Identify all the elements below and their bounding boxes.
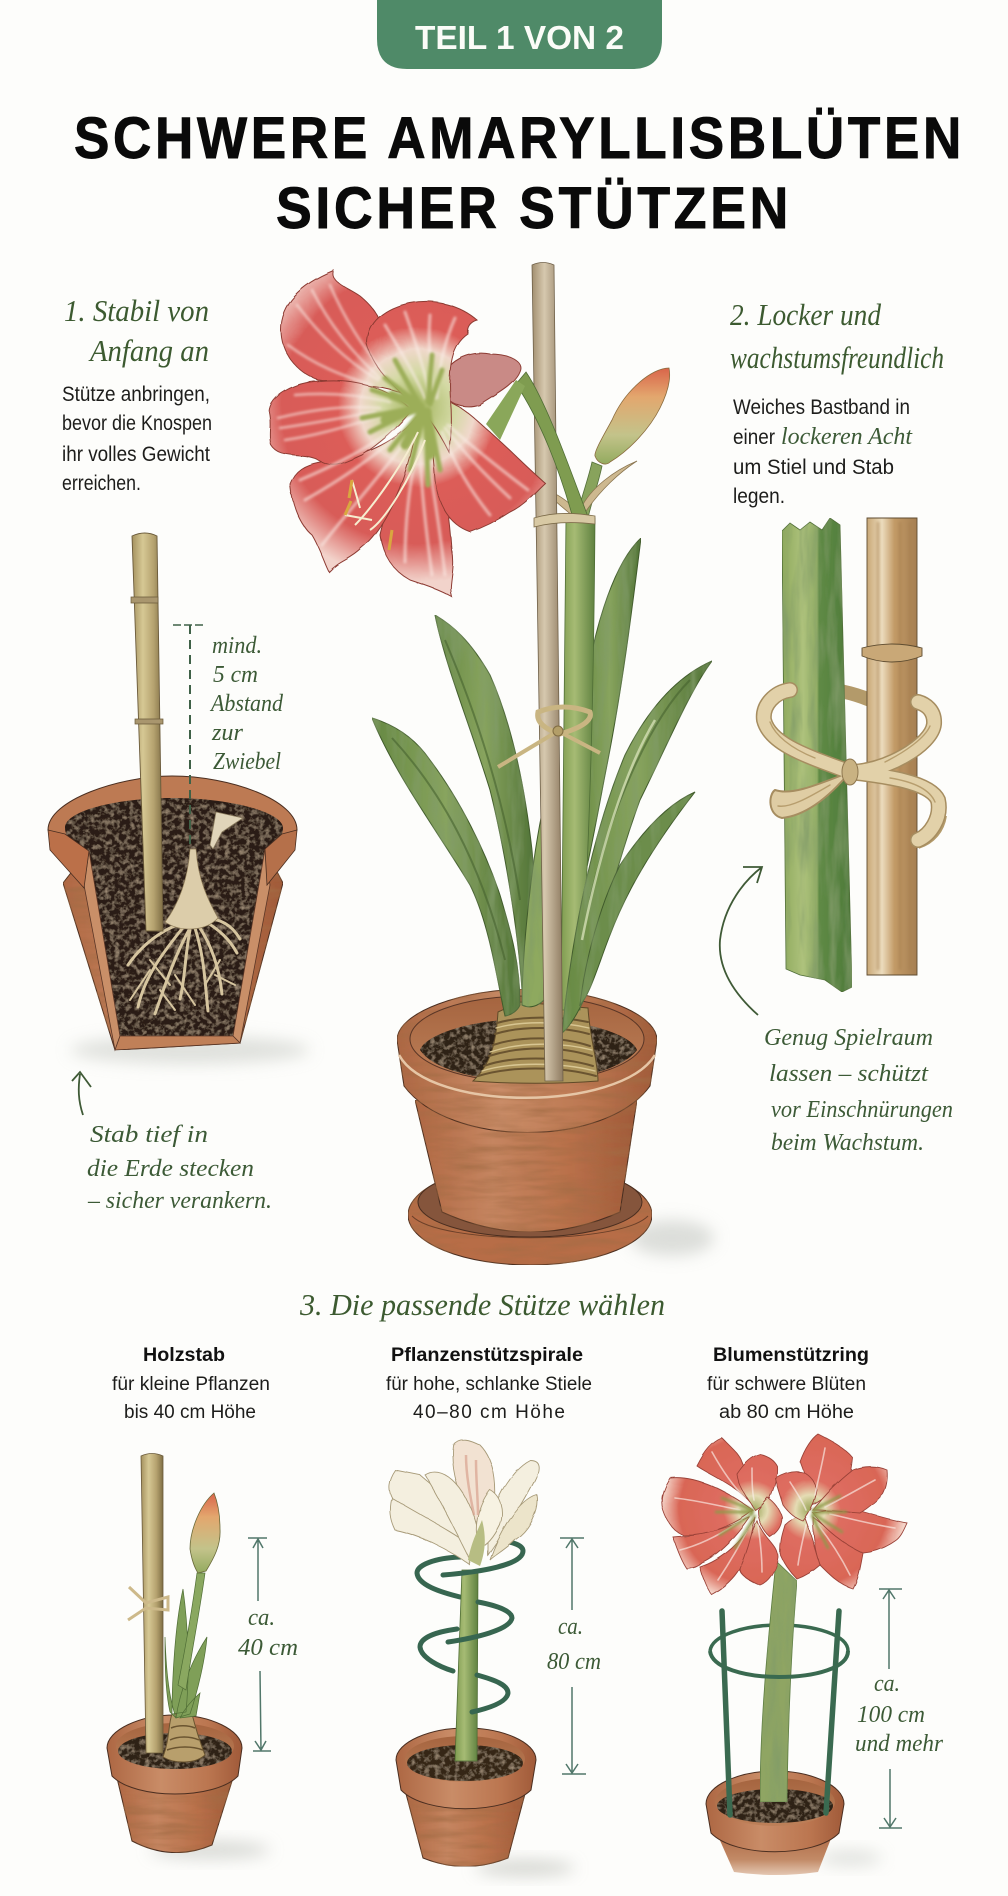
column caption	[707, 1345, 869, 1423]
flower throat	[468, 1520, 485, 1566]
column: Pflanzenstützspirale	[386, 1345, 601, 1876]
bamboo	[867, 518, 917, 975]
flower stem	[516, 372, 590, 522]
height arrow	[879, 1589, 902, 1828]
height label	[855, 1671, 944, 1757]
pot body	[718, 1836, 832, 1875]
height label: ca.	[874, 1671, 900, 1697]
height label	[238, 1605, 298, 1661]
spiral back	[417, 1557, 460, 1671]
bamboo streaks	[878, 522, 910, 970]
back leaf	[578, 538, 641, 905]
callout	[764, 1025, 953, 1156]
column caption: ab 80 cm Höhe	[719, 1402, 854, 1423]
arrow	[720, 867, 762, 1015]
ground shadow	[150, 1841, 270, 1859]
callout: – sicher verankern.	[87, 1188, 272, 1214]
callout: Genug Spielraum	[764, 1025, 933, 1051]
raffia figure eight	[764, 690, 939, 840]
cut walls	[84, 849, 270, 1050]
leaves	[372, 615, 712, 1033]
stamens	[345, 432, 425, 530]
thick stem	[760, 1561, 797, 1802]
rim lip highlight	[399, 1055, 655, 1098]
pill badge: TEIL 1 VON 2	[415, 19, 624, 56]
measure label: mind.	[212, 633, 262, 659]
step 2 tie detail illustration	[720, 518, 953, 1156]
column caption	[112, 1345, 270, 1423]
step 2 text: Weiches Bastband in	[733, 396, 910, 419]
ground shadow	[818, 1850, 882, 1866]
rim front left and right	[48, 830, 89, 888]
step 1 text: erreichen.	[62, 472, 141, 495]
petal streaks small	[675, 1448, 895, 1580]
measure label: zur	[211, 720, 244, 746]
bulb	[163, 1714, 205, 1762]
soil	[118, 1733, 232, 1769]
right flower	[775, 1434, 907, 1589]
column: Holzstab	[107, 1345, 298, 1859]
cage back	[722, 1611, 839, 1815]
bamboo stake	[132, 533, 163, 931]
callout: Stab tief in	[90, 1122, 208, 1148]
bulb	[473, 1002, 598, 1083]
callout: die Erde stecken	[87, 1156, 254, 1182]
callout	[87, 1122, 272, 1214]
step 1 text: Anfang an	[88, 333, 209, 368]
stake	[532, 262, 563, 1081]
step 1 text: 1. Stabil von	[64, 293, 209, 328]
step 2 text: legen.	[733, 485, 785, 508]
step 1 text: Stütze anbringen,	[62, 383, 210, 406]
bud and bracts	[540, 368, 670, 520]
pot	[117, 1778, 233, 1853]
main stem	[561, 518, 595, 1010]
column caption	[386, 1345, 592, 1423]
step 3 heading: 3. Die passende Stütze wählen	[299, 1287, 665, 1322]
height label: 100 cm	[857, 1702, 925, 1728]
height label: 40 cm	[238, 1635, 298, 1661]
dashed measure line	[173, 624, 206, 626]
column caption: für schwere Blüten	[707, 1374, 866, 1395]
step 1 text	[62, 293, 212, 495]
height label: und mehr	[855, 1731, 944, 1757]
column caption: für hohe, schlanke Stiele	[386, 1374, 592, 1395]
step 2 text: 2. Locker und	[730, 297, 881, 332]
pot rim	[397, 989, 657, 1132]
knot	[842, 759, 858, 785]
column caption: Blumenstützring	[713, 1345, 869, 1366]
column caption: Holzstab	[143, 1345, 225, 1366]
left flower	[662, 1438, 782, 1595]
step 2 text: wachstumsfreundlich	[730, 340, 944, 375]
stem	[455, 1570, 478, 1761]
soil	[65, 798, 283, 1036]
callout: lassen – schützt	[769, 1061, 929, 1087]
lower tie	[498, 707, 600, 767]
flower throat	[362, 355, 442, 485]
green stem	[782, 518, 852, 992]
pot outer walls	[63, 849, 283, 1050]
height arrow	[560, 1538, 586, 1774]
white flower	[389, 1440, 539, 1565]
leaf highlights	[582, 720, 655, 940]
column caption: 40–80 cm Höhe	[413, 1402, 565, 1423]
pot	[405, 1790, 526, 1866]
step 1 cutaway pot illustration	[48, 533, 310, 1214]
column caption: für kleine Pflanzen	[112, 1374, 270, 1395]
arrow	[72, 1072, 91, 1115]
shard	[210, 812, 243, 849]
ring front	[710, 1651, 848, 1677]
height label	[547, 1614, 601, 1675]
petal blush	[466, 1455, 478, 1515]
height label: ca.	[248, 1605, 275, 1631]
spiral front	[443, 1541, 523, 1712]
bamboo nodes	[131, 597, 163, 724]
bud stem	[178, 1573, 205, 1690]
pot body	[415, 1100, 637, 1232]
roots	[128, 918, 240, 1014]
step 2 text: lockeren Acht	[781, 424, 913, 450]
title	[74, 106, 965, 241]
flower throats	[716, 1496, 846, 1548]
soil	[420, 1019, 637, 1081]
height label: ca.	[558, 1614, 583, 1640]
amaryllis flower	[269, 271, 545, 597]
bulb strands	[167, 1726, 203, 1750]
pot inner	[410, 996, 644, 1082]
step 2 text: einer	[733, 426, 775, 449]
step 2 text: um Stiel und Stab	[733, 456, 894, 479]
pot saucer	[408, 1165, 652, 1265]
bamboo node	[862, 644, 922, 662]
callout: beim Wachstum.	[771, 1130, 924, 1156]
bud	[190, 1493, 220, 1573]
bulb base	[165, 849, 218, 929]
rim back	[48, 776, 297, 838]
petal streaks	[278, 285, 528, 575]
soil	[717, 1789, 833, 1823]
tie	[128, 1587, 168, 1620]
upper tie	[534, 513, 595, 527]
measure label: 5 cm	[213, 662, 258, 688]
column caption: bis 40 cm Höhe	[124, 1402, 256, 1423]
callout: vor Einschnürungen	[771, 1097, 953, 1123]
ground shadow	[70, 1036, 310, 1064]
measure label: Abstand	[209, 691, 284, 717]
leaves	[165, 1589, 207, 1718]
step 2 text	[730, 297, 944, 508]
ground shadow	[475, 1860, 575, 1876]
pot rim	[706, 1771, 844, 1852]
height arrow	[248, 1538, 271, 1751]
ground shadow	[630, 1220, 714, 1256]
step 1 text: ihr volles Gewicht	[62, 443, 210, 466]
column caption: Pflanzenstützspirale	[391, 1345, 583, 1366]
main amaryllis illustration	[269, 262, 714, 1265]
wooden stake	[141, 1454, 163, 1753]
pill badge	[377, 0, 662, 69]
measure label	[209, 633, 284, 775]
step 1 text: bevor die Knospen	[62, 412, 212, 435]
raffia back strands	[785, 687, 940, 842]
column: Blumenstützring	[662, 1345, 944, 1875]
measure label: Zwiebel	[213, 749, 281, 775]
height label: 80 cm	[547, 1649, 601, 1675]
soil	[407, 1745, 523, 1781]
leaf midribs	[392, 640, 690, 960]
title: SICHER STÜTZEN	[276, 176, 792, 241]
